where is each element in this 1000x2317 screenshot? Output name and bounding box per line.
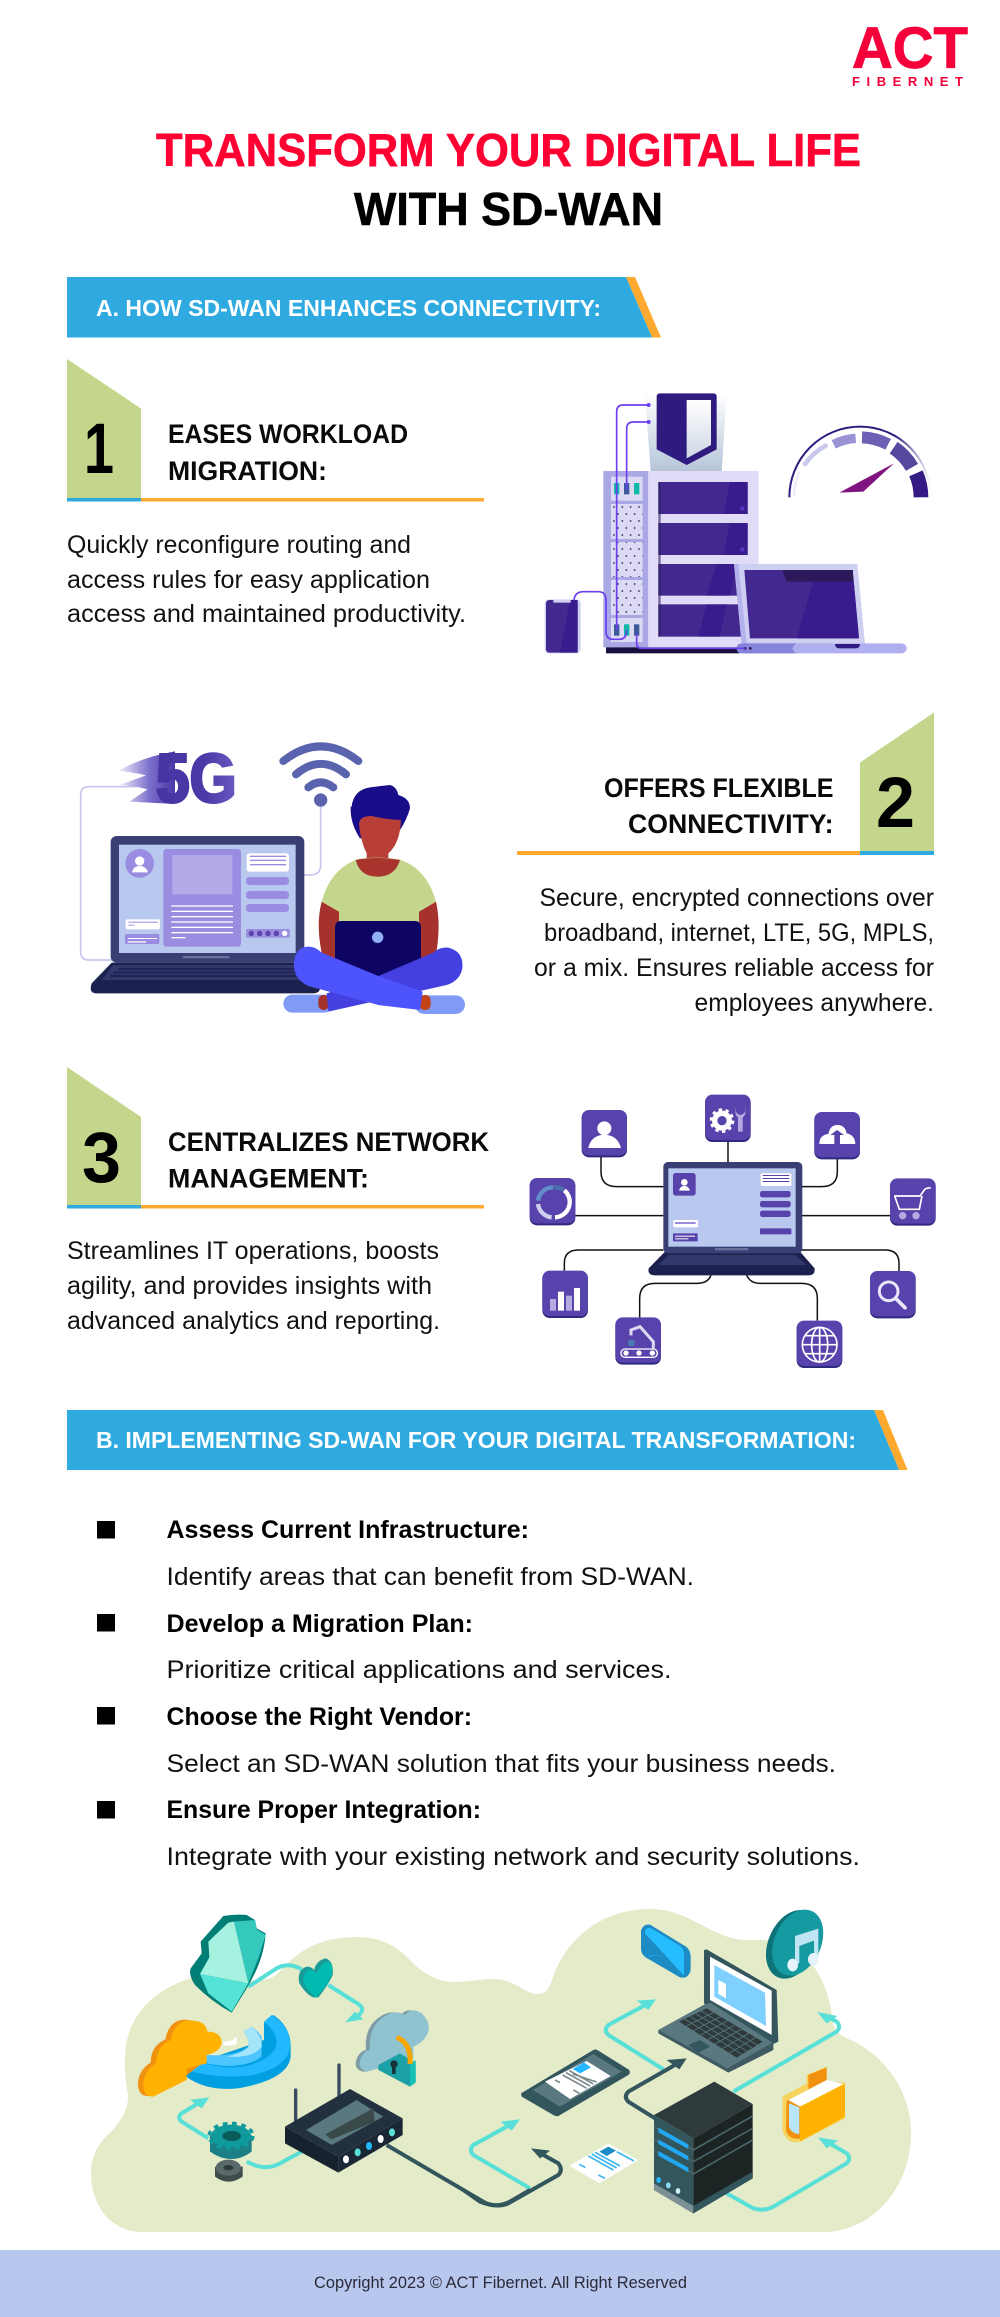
left half icons	[138, 1915, 530, 2205]
number badge 3: 3	[82, 1119, 121, 1198]
background blob	[91, 1909, 911, 2232]
icon: 5G	[118, 741, 237, 817]
step 2	[97, 1610, 672, 1684]
icon: envelope	[641, 1924, 691, 1978]
panel: item 3 centralizes network management	[67, 1067, 489, 1335]
body text 2: Secure, encrypted connections over	[540, 884, 934, 912]
icon: laptop	[91, 836, 320, 993]
step 1: Assess Current Infrastructure:	[166, 1516, 529, 1544]
step 3: Select an SD-WAN solution that fits your business needs.	[166, 1750, 836, 1778]
icon: document	[569, 2143, 638, 2183]
icon: cloud and padlock	[356, 2010, 429, 2087]
step 4: Ensure Proper Integration:	[166, 1796, 481, 1824]
heading 2	[604, 773, 834, 839]
number badge 3	[67, 1067, 141, 1205]
title	[156, 124, 861, 235]
icon: cloud upload	[814, 1112, 860, 1159]
illustration: laptop network hub with nine icons	[530, 1095, 936, 1368]
body text 1: Quickly reconfigure routing and	[67, 531, 411, 559]
connector lines	[564, 1141, 899, 1321]
icon: orange cloud and blue rings	[138, 2015, 291, 2097]
right half icons	[463, 1902, 849, 2213]
implementation step list	[97, 1516, 860, 1871]
section banner A	[67, 277, 661, 338]
panel: item 1 eases workload migration	[67, 359, 484, 628]
icon: shield	[657, 393, 717, 465]
body text 1	[67, 531, 466, 628]
heading 3: CENTRALIZES NETWORK	[168, 1127, 489, 1157]
icon: gears	[209, 2123, 253, 2182]
footer	[0, 2250, 1000, 2317]
arrows right	[606, 1999, 849, 2210]
title: WITH SD-WAN	[354, 183, 663, 235]
step 4: Integrate with your existing network and security solutions.	[166, 1843, 860, 1871]
illustration: server, shield, gauge, laptop, phone	[545, 393, 931, 653]
cable router to phone	[387, 2145, 530, 2205]
title: TRANSFORM YOUR DIGITAL LIFE	[156, 124, 861, 176]
logo: ACT Fibernet: FIBERNET	[852, 74, 963, 89]
dark arrows	[463, 2058, 687, 2205]
heading 1	[168, 419, 408, 486]
heading 1: MIGRATION:	[168, 456, 327, 486]
wires	[574, 403, 745, 648]
step 3	[97, 1703, 836, 1778]
heading 3	[168, 1127, 489, 1194]
icon: robot arm conveyor	[615, 1317, 661, 1365]
number badge 1	[67, 359, 141, 498]
step 1: Identify areas that can benefit from SD-WAN.	[166, 1563, 694, 1591]
icon: speed gauge	[789, 427, 931, 497]
icon: donut chart	[530, 1178, 575, 1225]
body text 3: agility, and provides insights with	[67, 1272, 432, 1300]
step 2: Prioritize critical applications and services.	[166, 1656, 672, 1684]
icon: smartphone	[521, 2049, 630, 2116]
icon: wifi	[283, 746, 358, 807]
icon: laptop	[658, 1949, 778, 2073]
icon: shopping cart	[890, 1178, 936, 1226]
icon: magnifier	[870, 1271, 916, 1318]
body text 3: Streamlines IT operations, boosts	[67, 1237, 439, 1265]
icon: globe	[797, 1321, 842, 1368]
section banner B	[67, 1410, 908, 1470]
heading 2: OFFERS FLEXIBLE	[604, 773, 834, 803]
section banner A: A. HOW SD-WAN ENHANCES CONNECTIVITY:	[96, 295, 601, 321]
arrows left	[179, 1965, 530, 2188]
icon: laptop	[734, 564, 907, 653]
icon: 5G: 5G	[156, 741, 237, 817]
body text 2	[534, 884, 934, 1017]
step 4	[97, 1796, 860, 1871]
icon: folder	[782, 2067, 845, 2142]
icon: bar chart	[542, 1271, 588, 1318]
heading 2: CONNECTIVITY:	[628, 809, 834, 839]
number badge 2: 2	[876, 764, 915, 843]
icon: server stack	[654, 2082, 753, 2213]
step 3: Choose the Right Vendor:	[166, 1703, 472, 1731]
icon: server rack	[603, 471, 759, 653]
body text 1: access and maintained productivity.	[67, 600, 466, 628]
icon: person	[582, 1110, 627, 1157]
icon: gear and wrench	[705, 1095, 751, 1142]
step 1	[97, 1516, 694, 1591]
body text 1: access rules for easy application	[67, 566, 430, 594]
panel: item 2 offers flexible connectivity	[517, 712, 934, 1017]
body text 2: or a mix. Ensures reliable access for	[534, 954, 934, 982]
step 2: Develop a Migration Plan:	[166, 1610, 473, 1638]
body text 3	[67, 1237, 440, 1335]
icon: shield	[190, 1915, 266, 2013]
illustration: isometric network scene	[91, 1902, 911, 2232]
number badge 2	[860, 712, 934, 851]
heading 3: MANAGEMENT:	[168, 1164, 369, 1194]
body text 3: advanced analytics and reporting.	[67, 1307, 440, 1335]
body text 2: broadband, internet, LTE, 5G, MPLS,	[544, 919, 934, 947]
icon: router	[285, 2065, 403, 2173]
number badge 1: 1	[84, 410, 114, 489]
section banner B: B. IMPLEMENTING SD-WAN FOR YOUR DIGITAL TRANSFORMATION:	[96, 1427, 856, 1453]
heading 1: EASES WORKLOAD	[168, 419, 408, 449]
icon: music disc	[756, 1902, 833, 1987]
cables	[81, 787, 321, 960]
body text 2: employees anywhere.	[694, 989, 934, 1017]
icon: heart	[299, 1958, 333, 1997]
logo: ACT Fibernet: ACT	[852, 16, 968, 81]
icon: laptop hub	[648, 1162, 815, 1275]
person sitting with laptop	[283, 785, 465, 1014]
footer: Copyright 2023 © ACT Fibernet. All Right Reserved	[314, 2274, 687, 2292]
illustration: 5G, wifi, laptop and person	[81, 741, 465, 1014]
icon: phone	[545, 599, 581, 653]
